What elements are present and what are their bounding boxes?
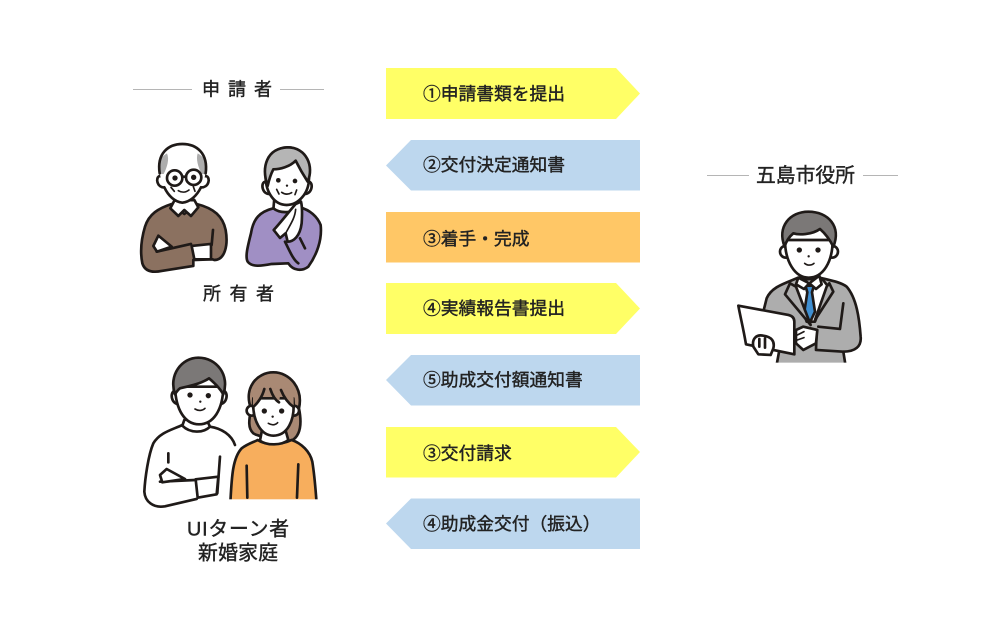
arrow: step 4	[386, 283, 640, 334]
arrow: step 5	[386, 355, 640, 406]
arrow: step 2	[386, 140, 640, 190]
heading: applicants: 申請者	[202, 80, 272, 100]
arrow: step 2: ②交付決定通知書	[423, 155, 565, 175]
arrow: step 4: ④実績報告書提出	[423, 298, 565, 318]
icon: elderly woman	[247, 147, 321, 270]
icon: city hall officer with tablet	[738, 212, 861, 371]
box: step 3: ③着手・完成	[423, 229, 530, 249]
arrow: step 5: ⑤助成交付額通知書	[423, 370, 583, 390]
box: step 3	[386, 212, 640, 262]
heading: Goto City Hall: 五島市役所	[756, 165, 855, 187]
arrow: step 1	[386, 68, 640, 119]
arrow: step 3 invoice	[386, 427, 640, 478]
arrow: step 4 payment: ④助成金交付（振込）	[423, 514, 601, 534]
arrow: step 4 payment	[386, 498, 640, 549]
label: owners: 所有者	[203, 284, 274, 304]
label: UI-turn and newlywed households: 新婚家庭	[198, 542, 278, 564]
icon: elderly man	[141, 144, 227, 272]
arrow: step 3 invoice: ③交付請求	[423, 444, 512, 464]
label: UI-turn and newlywed households	[187, 518, 289, 564]
icon: young woman	[225, 372, 322, 508]
icon: young man	[144, 358, 238, 507]
label: UI-turn and newlywed households: UIターン者	[187, 518, 289, 540]
arrow: step 1: ①申請書類を提出	[423, 84, 565, 104]
